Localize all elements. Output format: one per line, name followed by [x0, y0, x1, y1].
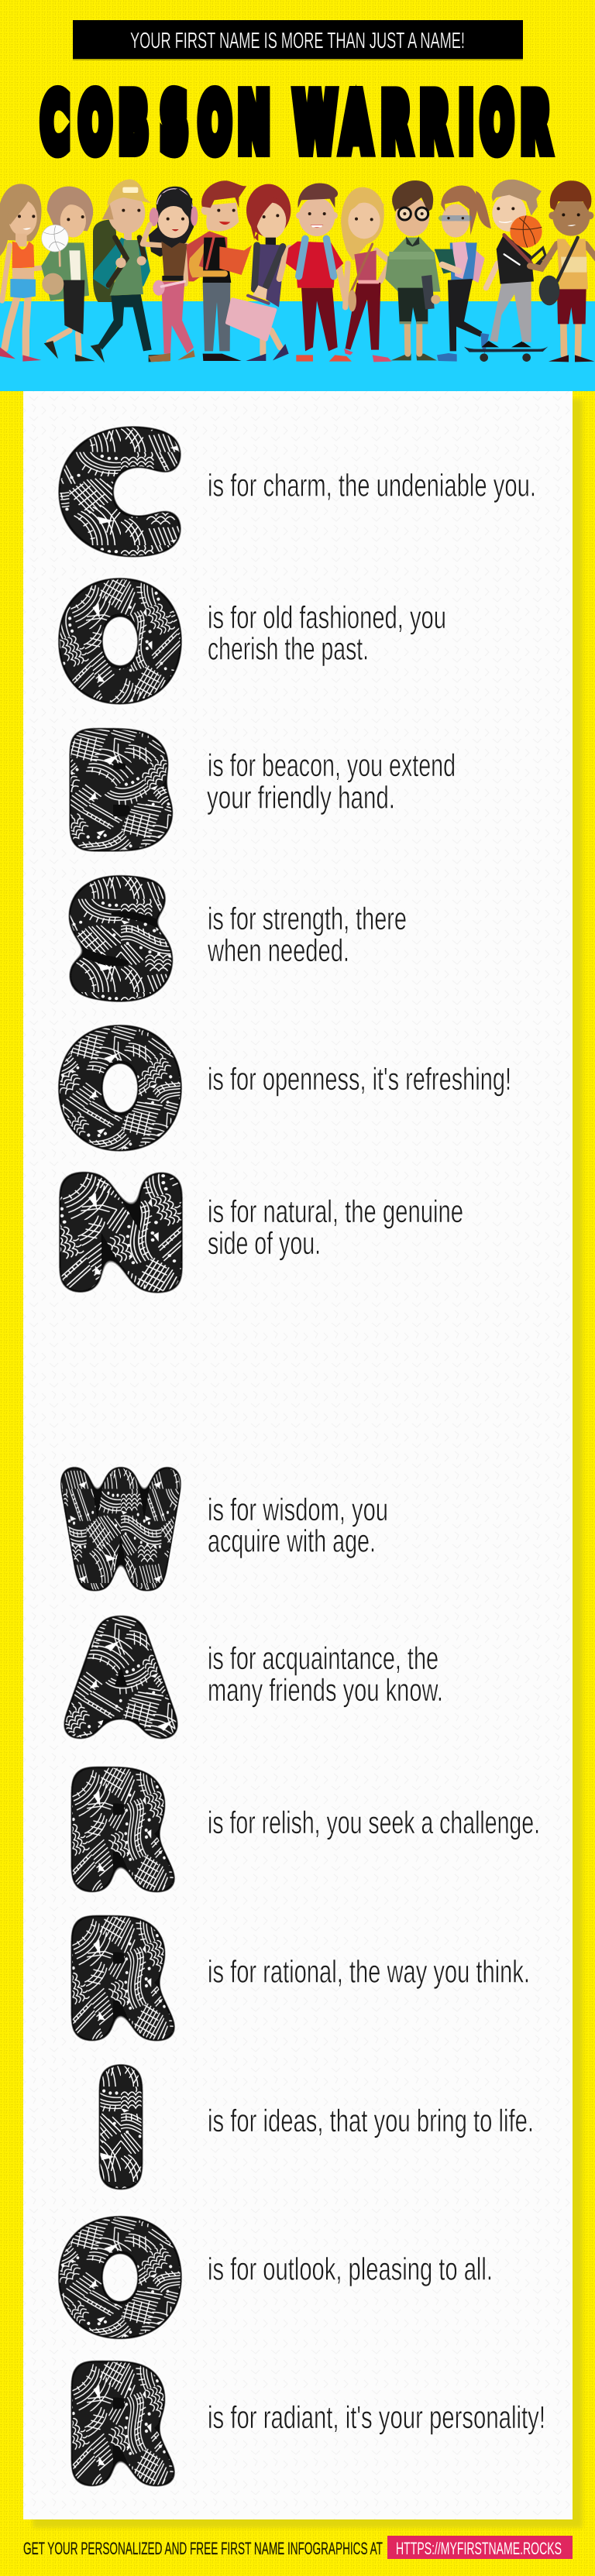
panel: name acrostic card — [23, 391, 573, 2519]
text: W meaning: is for wisdom, you — [208, 1492, 388, 1527]
text: N meaning — [208, 1194, 463, 1261]
illustration: group of students right half — [280, 180, 595, 362]
row: A — [64, 1591, 443, 1770]
person: boy in red shirt — [280, 183, 352, 362]
text: O meaning: is for old fashioned, you — [208, 599, 446, 635]
person: girl with pink bag — [227, 184, 291, 361]
text: B meaning — [207, 747, 456, 815]
text: N meaning: side of you. — [208, 1225, 321, 1261]
icon: ornate letter A: A — [64, 1591, 177, 1770]
row: R — [66, 1894, 530, 2069]
icon: ornate letter R: R — [66, 1894, 174, 2069]
text: A meaning — [208, 1640, 443, 1708]
person: girl with tablet and ponytail — [435, 186, 491, 362]
footer — [23, 2536, 573, 2559]
row: S — [65, 857, 407, 1028]
tagline banner — [73, 20, 523, 60]
row: O — [59, 559, 446, 730]
person: boy with glasses — [385, 180, 440, 360]
person: girl with volleyball — [41, 187, 95, 362]
icon: ornate letter W: W — [61, 1445, 181, 1619]
row: O — [59, 1006, 511, 1176]
person: skateboarder with basketball — [464, 180, 551, 362]
row: I — [94, 2043, 534, 2217]
row: W — [61, 1445, 388, 1619]
header — [41, 20, 550, 169]
text: N meaning: is for natural, the genuine — [208, 1194, 463, 1229]
illustration floor band — [0, 301, 595, 391]
text: S meaning — [207, 901, 407, 968]
text: W meaning: acquire with age. — [208, 1523, 376, 1558]
text: S meaning: is for strength, there — [208, 901, 407, 936]
row: R — [66, 1746, 540, 1920]
row: B — [64, 707, 456, 878]
person: boy with red hair and book — [187, 180, 252, 361]
row: C — [61, 409, 536, 581]
icon: ornate letter I: I — [94, 2043, 148, 2217]
icon: ornate letter C: C — [61, 409, 181, 581]
icon: ornate letter B: B — [64, 707, 176, 878]
person: girl in orange top — [0, 184, 58, 362]
text: B meaning: is for beacon, you extend — [208, 747, 456, 783]
icon: ornate letter O: O — [59, 1006, 181, 1176]
text: A meaning: many friends you know. — [208, 1672, 443, 1708]
icon: ornate letter O: O — [59, 559, 181, 730]
text: A meaning: is for acquaintance, the — [208, 1640, 439, 1676]
text: O meaning — [208, 599, 446, 666]
illustration: group of students left half — [0, 180, 291, 362]
text: W meaning — [208, 1492, 388, 1558]
icon: ornate letter O: O — [59, 2196, 181, 2364]
row: R — [66, 2340, 545, 2514]
person: boy in yellow tank top — [530, 180, 595, 362]
row: N — [50, 1147, 463, 1324]
person: blonde girl — [341, 187, 392, 362]
text: B meaning: your friendly hand. — [207, 779, 395, 815]
icon: ornate letter S: S — [65, 857, 177, 1028]
title: COBSON WARRIOR — [41, 78, 550, 169]
text: O meaning: cherish the past. — [208, 630, 369, 666]
person: boy with cap and backpack — [91, 180, 170, 362]
person: girl with headphones — [143, 187, 198, 362]
icon: ornate letter R: R — [66, 1746, 174, 1920]
row: O — [59, 2196, 493, 2364]
text: S meaning: when needed. — [207, 933, 349, 968]
icon: ornate letter N: N — [50, 1147, 192, 1324]
icon: ornate letter R: R — [66, 2340, 174, 2514]
